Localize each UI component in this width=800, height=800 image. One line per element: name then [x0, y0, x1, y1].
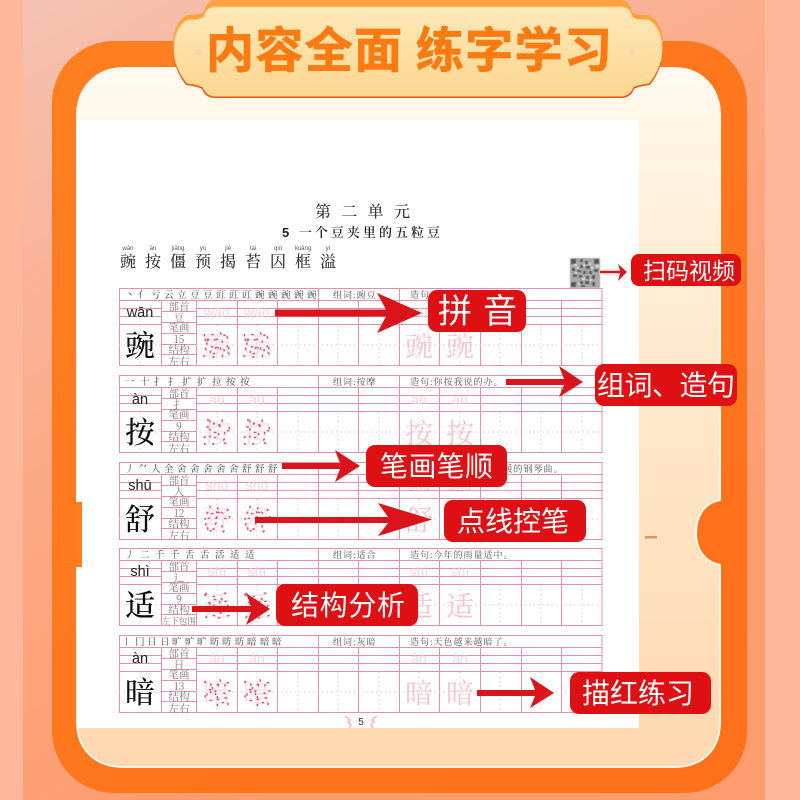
pinyin: àn [132, 651, 148, 667]
radical info: 结构 [168, 689, 190, 704]
left side tab [76, 502, 82, 567]
radical info: 部首 [168, 473, 190, 488]
characters list: 揭 [220, 249, 236, 272]
pinyin list: tái [250, 246, 256, 252]
dotted characters: 豌 [243, 325, 271, 365]
traced pinyin: shì [248, 563, 266, 579]
label: 描红练习 [570, 672, 711, 714]
pinyin list: kuāng [295, 246, 311, 252]
worksheet row: 按 [119, 374, 602, 456]
characters list: 僵 [170, 249, 186, 272]
tracing characters [405, 412, 475, 452]
traced pinyin: àn [249, 650, 265, 666]
pinyin list: àn [150, 246, 156, 252]
stroke order: 丶亻亏云立豆豆豇豇豇豌豌豌豌豌 [125, 287, 317, 301]
traced pinyin: shū [449, 477, 471, 493]
characters list: 苔 [245, 249, 261, 272]
tracing characters [405, 499, 474, 539]
header plaque [173, 0, 663, 98]
white worksheet page [77, 120, 639, 728]
traced pinyin: àn [209, 650, 225, 666]
arrow: 笔画笔顺 [282, 450, 360, 482]
traced pinyin: shì [208, 563, 226, 579]
worksheet row: 适: 造句:今年的雨量适中。 [410, 549, 514, 560]
label: 描红练习: 描红练习 [582, 678, 694, 709]
worksheet row: 适 [119, 547, 602, 627]
worksheet row: 豌 [119, 287, 602, 369]
radical info: 人 [174, 484, 185, 499]
lesson title: 5 一个豆夹里的五粒豆 [282, 225, 440, 240]
radical info [168, 299, 190, 369]
radical info: 部首 [168, 646, 190, 661]
label: 结构分析 [276, 584, 418, 626]
tracing characters: 暗 [446, 672, 474, 712]
traced pinyin: àn [209, 391, 225, 407]
dotted characters [203, 499, 271, 539]
traced pinyin [206, 477, 471, 493]
tracing characters: 暗 [405, 672, 433, 712]
model character: 按 [125, 408, 156, 452]
radical info: 左右 [168, 354, 190, 369]
pinyin list [121, 246, 331, 252]
tracing characters: 适 [405, 585, 433, 625]
arrow: 组词造句 [506, 366, 583, 397]
label: 组词、造句: 组词、造句 [597, 370, 735, 401]
model character: 适 [125, 581, 155, 625]
model character: 舒 [125, 495, 155, 539]
worksheet row: 暗 [119, 634, 602, 716]
small dash mark [645, 536, 657, 538]
worksheet row: 舒 [119, 461, 602, 543]
traced pinyin: shū [206, 477, 228, 493]
tracing characters [405, 585, 474, 625]
pinyin list: yì [326, 246, 331, 252]
dotted characters: 舒 [203, 499, 231, 539]
page number [345, 716, 377, 728]
model character: 豌 [125, 321, 155, 365]
characters list: 按 [145, 249, 162, 272]
traced pinyin: wān [203, 304, 230, 320]
characters list: 框 [295, 249, 311, 272]
radical info: 15 [174, 332, 185, 347]
arrow: QR to label [600, 264, 627, 281]
arrow: 结构分析 [192, 593, 270, 625]
label: 扫码视频: 扫码视频 [643, 258, 735, 284]
traced pinyin: àn [411, 650, 427, 666]
label: 结构分析: 结构分析 [291, 590, 405, 621]
stroke order: 丿⺈人全舍舍舍舍舍舒舒舒 [125, 461, 278, 475]
arrow: 点线控笔 [255, 503, 432, 536]
cream inner panel [77, 68, 720, 767]
traced pinyin [209, 391, 468, 407]
dotted characters [203, 585, 271, 625]
words and sentence: 组词:适合 [333, 549, 377, 560]
label: 点线控笔 [444, 500, 586, 542]
characters list: 豌 [120, 249, 136, 272]
worksheet row: 暗: 造句:天色越来越暗了。 [410, 636, 514, 647]
traced pinyin: wān [243, 304, 270, 320]
tracing characters: 适 [446, 585, 474, 625]
radical info: 日 [174, 657, 184, 672]
label: 笔画笔顺: 笔画笔顺 [380, 451, 493, 482]
traced pinyin: wān [405, 304, 432, 320]
traced pinyin: shì [451, 563, 469, 579]
label: 拼音: 拼音 [438, 293, 528, 331]
radical info: 部首 [168, 386, 190, 401]
dotted characters: 豌 [203, 325, 231, 365]
radical info: 笔画 [168, 320, 190, 335]
radical info: 9 [176, 592, 182, 607]
radical info: 结构 [168, 342, 190, 357]
plaque rivets [196, 48, 636, 56]
stroke order: 丨冂日日旷旷旷昉昉昉暗暗暗 [122, 634, 282, 648]
pinyin list: wān [121, 246, 134, 252]
radical info: 笔画 [168, 494, 190, 509]
radical info: 12 [174, 506, 185, 521]
model character: 暗 [125, 668, 155, 712]
radical info: 笔画 [168, 667, 190, 682]
QR code [570, 258, 600, 288]
radical info: 部首 [168, 299, 190, 314]
worksheet heading [282, 203, 440, 240]
traced pinyin: àn [411, 391, 427, 407]
traced pinyin: shū [408, 477, 430, 493]
pinyin: shì [130, 564, 150, 580]
radical info: 结构 [168, 516, 190, 531]
radical info: 左右 [168, 528, 190, 543]
worksheet row: 豌: 造句: [410, 289, 434, 300]
words and sentence: 组词:豌豆 [333, 289, 377, 300]
radical info: 辶 [174, 570, 185, 585]
radical info: 结构 [168, 429, 190, 444]
dotted characters: 适 [243, 585, 271, 625]
pinyin list: qiú [274, 246, 282, 252]
radical info: 部首 [168, 559, 190, 574]
traced pinyin [208, 563, 469, 579]
unit title: 第二单元 [315, 203, 410, 221]
dotted characters: 按 [243, 412, 271, 452]
stroke order: 一十扌扌扩扩拉按按 [125, 374, 250, 388]
radical info: 9 [176, 419, 182, 434]
traced pinyin: shū [246, 477, 268, 493]
dotted characters: 适 [203, 585, 231, 625]
characters list: 溢 [320, 249, 336, 272]
dotted characters [203, 672, 271, 712]
radical info [162, 559, 196, 627]
tracing characters [405, 672, 474, 712]
characters list: 预 [195, 249, 212, 272]
traced pinyin: àn [452, 391, 468, 407]
traced pinyin: àn [452, 650, 468, 666]
traced pinyin: wān [446, 304, 473, 320]
dotted characters: 按 [203, 412, 231, 452]
words and sentence: 造句:这是一首轻柔舒缓的钢琴曲。 [410, 463, 564, 474]
arrow: 拼音 [275, 293, 422, 333]
words and sentence: 组词:按摩 [333, 376, 377, 387]
pinyin: àn [132, 392, 148, 408]
radical info: 13 [174, 679, 185, 694]
label: 点线控笔: 点线控笔 [457, 506, 569, 537]
worksheet row: 按: 造句:你按我说的办。 [410, 376, 504, 387]
pinyin: wān [126, 305, 153, 321]
radical info: 豆 [174, 310, 185, 325]
label: 扫码视频 [631, 254, 741, 286]
radical info [168, 646, 190, 716]
radical info: 扌 [174, 397, 184, 412]
radical info: 笔画 [168, 407, 190, 422]
radical info: 左右 [168, 701, 190, 716]
stroke order: 丿二千千舌舌活适适 [125, 547, 255, 561]
characters list [120, 249, 336, 272]
dotted characters: 舒 [243, 499, 271, 539]
words and sentence: 组词:灰暗 [333, 636, 377, 647]
page number: 5 [358, 717, 364, 728]
radical info: 左右 [168, 441, 190, 456]
tracing characters: 按 [446, 412, 475, 452]
dotted characters: 暗 [203, 672, 231, 712]
pinyin list: yù [200, 246, 206, 252]
tracing characters: 按 [405, 412, 434, 452]
radical info: 结构 [168, 602, 190, 617]
traced pinyin [203, 304, 473, 320]
radical info [168, 386, 190, 456]
tracing characters: 舒 [446, 499, 474, 539]
radical info: 笔画 [168, 580, 190, 595]
dotted characters [203, 412, 271, 452]
tracing characters: 豌 [405, 325, 433, 365]
new character list [120, 246, 336, 272]
traced pinyin: shì [410, 563, 428, 579]
radical info: 左下包围 [162, 615, 196, 627]
title: 内容全面 练字学习 [206, 11, 612, 81]
dotted characters [203, 325, 271, 365]
tracing characters: 舒 [405, 499, 433, 539]
traced pinyin [209, 650, 468, 666]
traced pinyin: àn [249, 391, 265, 407]
pinyin list: jié [224, 246, 232, 252]
label: 笔画笔顺 [366, 445, 507, 487]
pinyin: shū [128, 478, 152, 494]
characters list: 囚 [270, 249, 286, 272]
tracing characters: 豌 [446, 325, 474, 365]
pinyin list: jiāng [171, 246, 184, 252]
radical info [168, 473, 190, 543]
arrow: 描红练习 [477, 677, 554, 708]
dotted characters: 暗 [243, 672, 271, 712]
tracing characters [405, 325, 474, 365]
